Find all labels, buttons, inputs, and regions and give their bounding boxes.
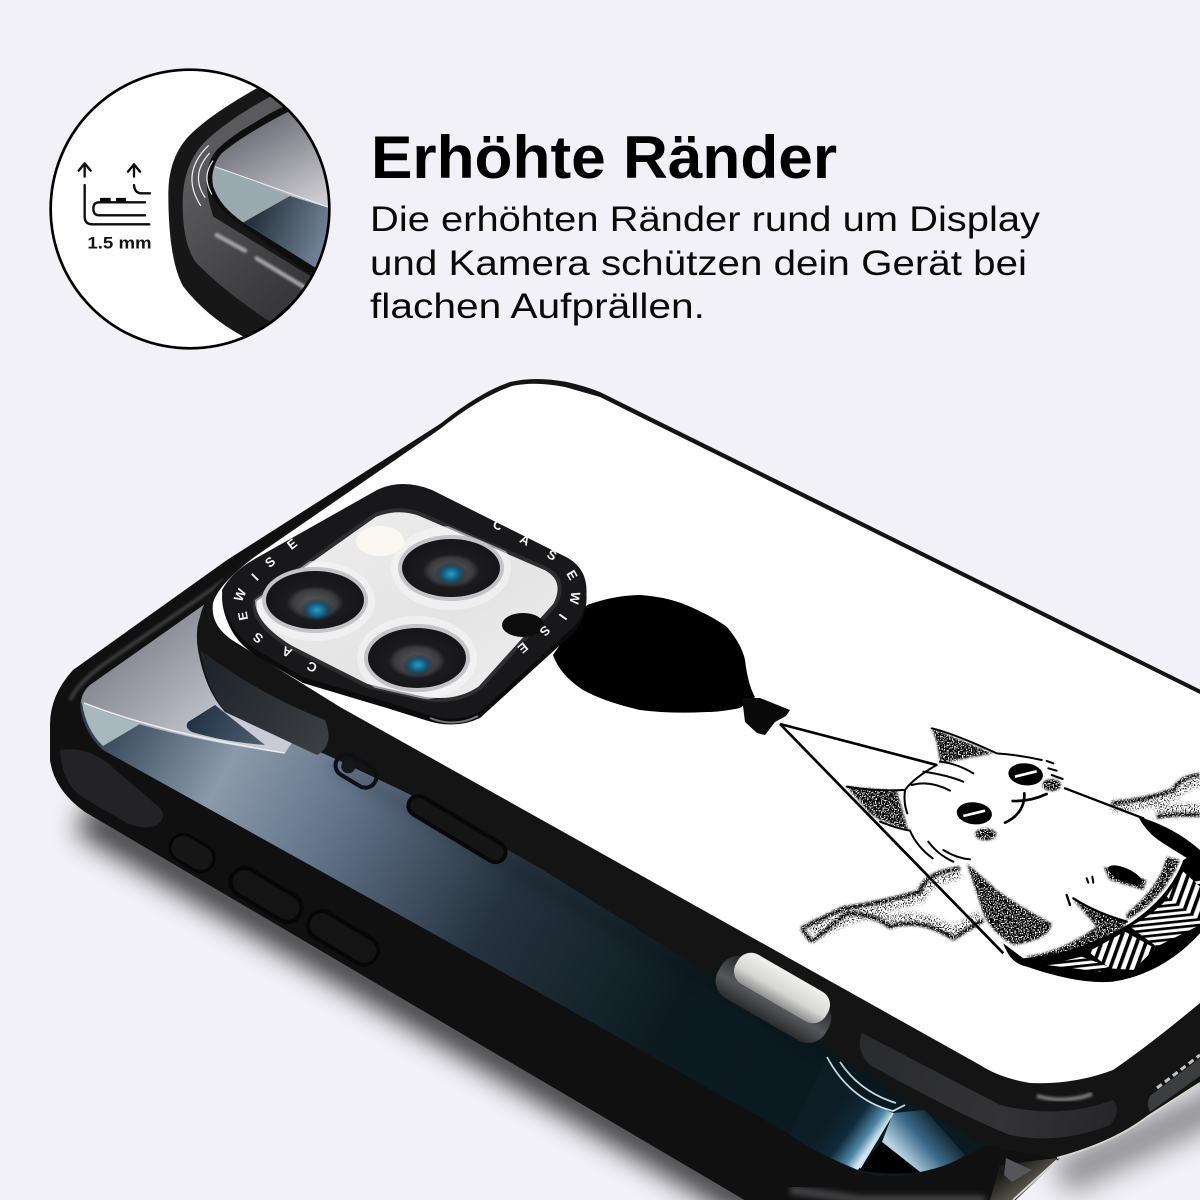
eye right glint <box>1015 771 1037 777</box>
artwork: cat in basket <box>780 724 1200 982</box>
eye right <box>1007 762 1044 787</box>
description text: Die erhöhten Ränder rund um Display <box>370 200 1041 239</box>
ring lettering: W <box>231 586 250 604</box>
white back plate <box>213 384 1200 1083</box>
ring lettering: E <box>284 535 300 553</box>
case body <box>50 424 1100 1200</box>
ring lettering: S <box>250 629 266 647</box>
phones illustration <box>50 379 1200 1200</box>
icon: raised edge diagram <box>79 163 150 224</box>
screen grey reflection <box>81 604 320 753</box>
inset dark inner lip <box>207 108 314 273</box>
sparse cloud stipple <box>808 782 1200 933</box>
stipple shading <box>802 728 1200 958</box>
button: volume down <box>300 904 386 972</box>
shadow: under front phone <box>85 816 790 1200</box>
ring lettering: S <box>544 546 560 564</box>
title: Erhöhte Ränder <box>371 124 837 191</box>
basket stripes lower <box>1047 957 1108 972</box>
ring lettering: I <box>248 570 262 584</box>
balloon knot <box>742 698 790 735</box>
top edge sheen <box>70 580 225 700</box>
front case light edge <box>1013 1160 1057 1200</box>
eye left glint <box>963 811 985 816</box>
basket stripes middle <box>1088 932 1155 970</box>
button: volume up <box>223 860 309 930</box>
silver lever <box>728 947 836 1029</box>
balloon body <box>553 595 755 713</box>
ring lettering: W <box>566 591 583 606</box>
ring lettering: A <box>279 643 294 661</box>
inset screen reflection <box>212 167 290 222</box>
inset dark wallpaper <box>243 196 330 268</box>
corner translucent panel <box>200 650 329 755</box>
button: power <box>402 789 512 869</box>
inset highlights <box>217 235 303 287</box>
inset screen <box>212 112 328 268</box>
basket stripes upper <box>1167 872 1200 920</box>
ring lettering: S <box>536 623 553 640</box>
description text: flachen Aufprällen. <box>370 287 705 326</box>
wallpaper light ribbon <box>790 1057 965 1174</box>
front case lower highlight <box>790 1190 985 1200</box>
inset case corner <box>168 88 314 336</box>
glow wedge left <box>790 1060 893 1170</box>
eye left <box>956 801 993 826</box>
basket stripes right <box>1130 880 1200 947</box>
bottom light edge <box>1057 1083 1200 1158</box>
cat eyes <box>956 762 1044 826</box>
ring lettering: S <box>262 553 278 571</box>
rim gloss <box>1037 1094 1092 1100</box>
inset measurement label: 1.5 mm <box>87 233 152 252</box>
basket <box>1003 850 1200 982</box>
description text <box>370 200 1041 326</box>
speaker holes <box>1157 1055 1200 1088</box>
ring lettering: E <box>563 567 581 583</box>
flash <box>356 526 404 556</box>
shadow: under back phone right <box>1060 1098 1200 1178</box>
bottom corner translucent panel <box>860 1033 1117 1138</box>
lens: left <box>262 567 368 633</box>
case corner translucent panel <box>60 749 163 827</box>
front phone buttons <box>163 827 386 972</box>
front case bronze strip <box>990 1158 1057 1200</box>
camera glass <box>254 510 560 700</box>
ring lettering: E <box>235 610 251 622</box>
screen highlight curve <box>84 703 285 753</box>
front phone case <box>50 424 1100 1200</box>
mute switch <box>331 750 381 792</box>
camera ring <box>222 484 587 719</box>
camera module <box>222 484 587 725</box>
ring lettering <box>231 516 583 676</box>
description text: und Kamera schützen dein Gerät bei <box>370 244 1027 283</box>
back phone side buttons <box>331 750 839 1050</box>
lidar sensor <box>502 613 544 637</box>
button: action <box>163 827 221 879</box>
light lines <box>827 1057 905 1168</box>
cat paw <box>1138 817 1200 860</box>
basket base <box>1003 850 1200 982</box>
black triangle <box>858 1142 920 1174</box>
dark wallpaper wedge <box>187 705 265 745</box>
lens surround glow <box>255 526 511 700</box>
ring lettering: C <box>490 516 506 534</box>
ring lettering: A <box>517 531 533 549</box>
inset: raised edge close-up <box>51 60 340 360</box>
ring lettering: C <box>304 658 319 676</box>
balloon strings <box>780 724 1003 953</box>
inset impact arcs <box>192 146 213 206</box>
inset circle outline <box>51 70 329 348</box>
back phone case <box>197 379 1200 1158</box>
camera ring shadow <box>222 490 587 725</box>
camera ring lower gloss <box>430 716 478 723</box>
shadow: back phone on screen <box>330 762 905 1095</box>
inset reflection line <box>215 167 330 208</box>
screen reflection panel <box>82 703 140 746</box>
right edge speaker <box>1148 1058 1200 1112</box>
lens: bottom <box>364 624 470 692</box>
front case charging port <box>1004 1158 1032 1182</box>
ring lettering: E <box>515 639 531 657</box>
inset glossy band <box>183 95 317 322</box>
cat outline <box>847 728 1143 922</box>
screen <box>80 600 1040 1176</box>
case rim <box>197 379 1200 1158</box>
glow wedge right <box>882 1110 965 1172</box>
silver lever recess <box>708 948 839 1050</box>
ring lettering: I <box>556 611 570 623</box>
artwork: balloon <box>553 595 790 735</box>
lens: top right <box>398 535 504 601</box>
cat side mark <box>1106 861 1144 889</box>
